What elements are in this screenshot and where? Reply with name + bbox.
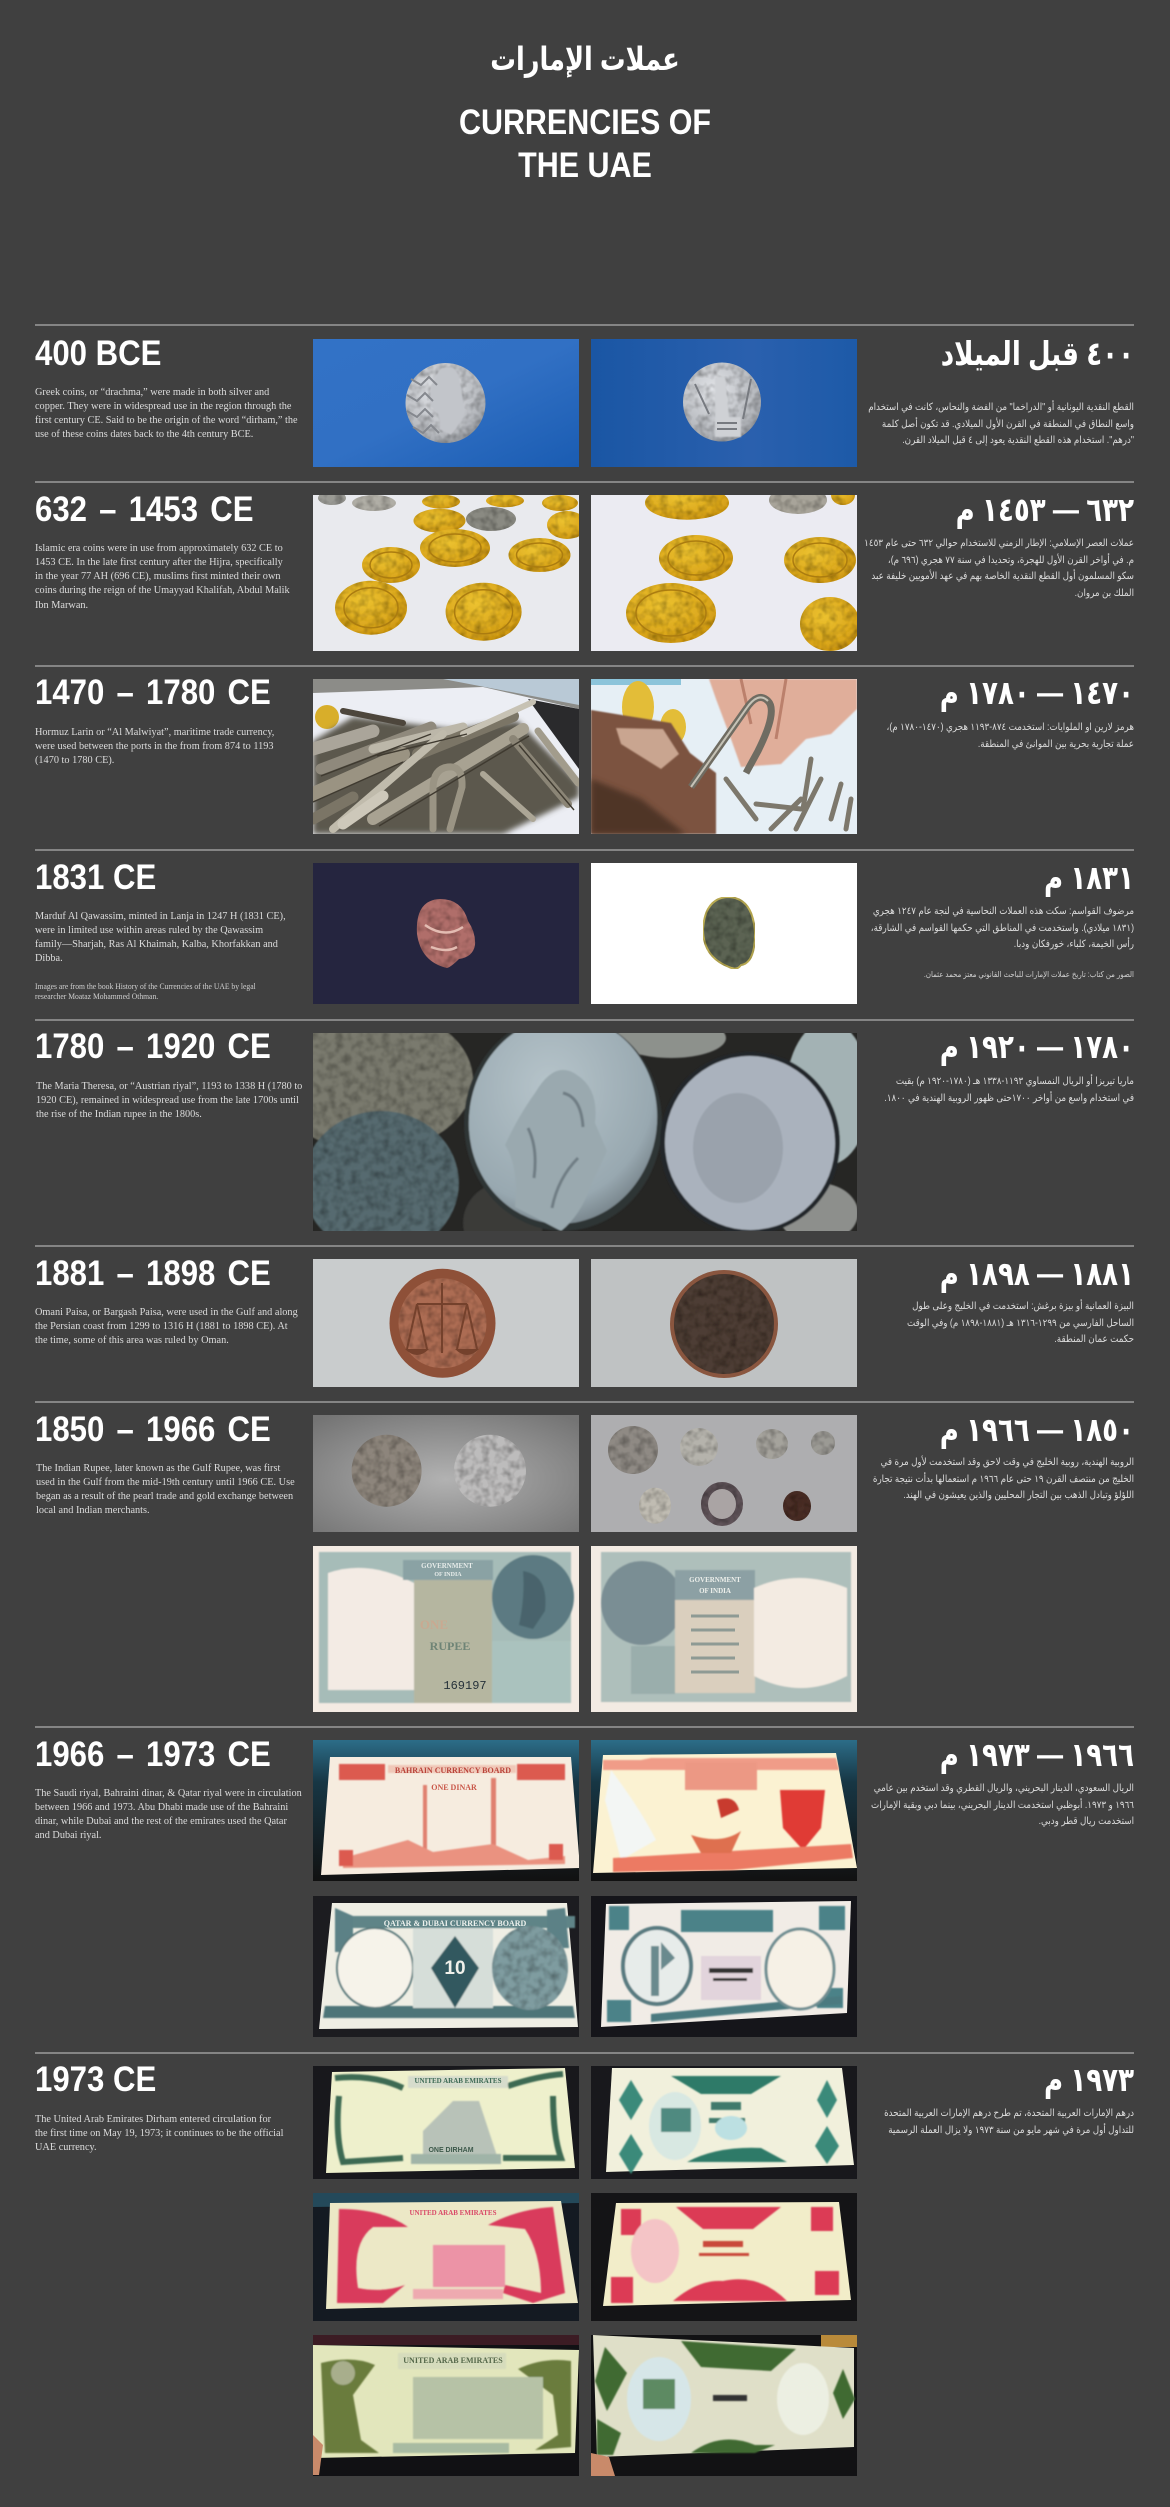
English text: The United Arab Emirates Dirham entered circulation for — [35, 2113, 271, 2125]
Arabic date heading: ١٩٦٦ — ١٩٧٣ م — [940, 1736, 1134, 1773]
English text: the time, some of this area was ruled by Oman. — [35, 1334, 229, 1346]
Arabic text: عملة تجارية بحرية بين الموانئ في المنطقة. — [978, 739, 1134, 750]
English text: began as a result of the pearl trade and gold exchange between — [36, 1490, 293, 1502]
Arabic date heading: ١٩٧٣ م — [1044, 2061, 1134, 2098]
English text: The Indian Rupee, later known as the Gulf Rupee, was first — [36, 1462, 280, 1474]
English text: 1920 CE), remained in widespread use from the late 1700s until — [36, 1094, 299, 1106]
photo: gold coins close-up — [591, 495, 857, 651]
photo: one rupee note front: ONE — [420, 1617, 448, 1632]
date heading: 1831 CE — [35, 858, 156, 897]
Arabic text — [864, 538, 1134, 599]
photo: Bahrain one dinar front — [591, 1740, 857, 1881]
photo: one rupee note front: 169197 — [443, 1679, 487, 1693]
Arabic date heading: ١٧٨٠ — ١٩٢٠ م — [940, 1028, 1134, 1065]
photo: coin on white — [591, 863, 857, 1004]
Arabic text: هرمز لارين او الملوايات: استخدمت ٨٧٤-١١٩٣ هجري (١٤٧٠-١٧٨٠ م)، — [887, 722, 1134, 733]
English text: used in the Gulf from the mid-19th century until 1966 CE. Use — [36, 1476, 295, 1488]
photo: copper coin with scales — [313, 1259, 579, 1387]
Arabic text: ١٩٦٦ و ١٩٧٣. أبوظبي استخدمت الدينار البحريني، بينما دبي وبقية الإمارات — [871, 1800, 1134, 1811]
English text: local and Indian merchants. — [36, 1504, 150, 1516]
photo: one dirham back: ONE DIRHAM — [428, 2147, 474, 2154]
date heading: 1973 CE — [35, 2060, 156, 2099]
English text: coins during the reign of the Umayyad Khalifah, Abdul Malik — [35, 584, 290, 596]
photo: one dirham back: UNITED ARAB EMIRATES — [414, 2077, 502, 2085]
date heading: 1780 – 1920 CE — [35, 1027, 271, 1066]
date heading: 400 BCE — [35, 334, 161, 373]
photo: Qatar and Dubai ten riyals back — [313, 1896, 579, 2037]
Arabic date heading: ١٤٧٠ — ١٧٨٠ م — [940, 674, 1134, 711]
photo: Bahrain one dinar back — [313, 1740, 579, 1881]
photo: hand holding bent silver bar — [591, 679, 857, 834]
English text: between 1966 and 1973. Abu Dhabi made use of the Bahraini — [35, 1801, 288, 1813]
photo: Qatar and Dubai ten riyals back: 10 — [444, 1958, 466, 1979]
Arabic text — [873, 1456, 1134, 1501]
photo: hundred dirhams back — [313, 2335, 579, 2476]
panel: 1470 – 1780 CE — [35, 665, 1134, 834]
image credit — [35, 982, 256, 1001]
English text — [35, 726, 274, 766]
photo: one rupee note back: OF INDIA — [699, 1587, 731, 1595]
Arabic text: للتداول أول مرة في شهر مايو من سنة ١٩٧٣ ولا يزال العملة الرسمية — [888, 2125, 1134, 2136]
English text: in the year 77 AH (696 CE), muslims first minted their own — [35, 570, 281, 582]
photo: one rupee note back: GOVERNMENT — [689, 1576, 741, 1584]
Arabic text: اللؤلؤ وتبادل الذهب بين التجار المحليين والذين يعيشون في الهند. — [903, 1490, 1134, 1501]
English text: The Saudi riyal, Bahraini dinar, & Qatar riyal were in circulation — [35, 1787, 302, 1799]
English text — [35, 542, 290, 611]
English text: Ibn Marwan. — [35, 599, 88, 611]
Arabic text — [868, 400, 1134, 446]
English title — [459, 102, 711, 184]
Arabic text: ماريا تيريزا أو الريال النمساوي ١١٩٣-١٣٣٨ هـ (١٧٨٠-١٩٢٠ م) بقيت — [896, 1076, 1134, 1087]
Arabic text: م. في أواخر القرن الأول للهجرة، وتحديدا في سنة ٧٧ هجري (٦٩٦ م)، — [888, 555, 1134, 566]
English text — [35, 2112, 292, 2154]
Arabic text: في استخدام واسع من أواخر ١٧٠٠حتى ظهور الروبية الهندية في ١٨٠٠. — [884, 1093, 1134, 1104]
English text: first century CE. Said to be the origin of the word “dirham,” the — [35, 414, 298, 426]
English text: 1453 CE. In the late first century after the Hijra, specifically — [35, 556, 283, 568]
English text: Dibba. — [35, 952, 63, 964]
Arabic date heading: ١٨٣١ م — [1044, 859, 1134, 896]
English text: The Maria Theresa, or “Austrian riyal”, 1193 to 1338 H (1780 to — [36, 1080, 302, 1092]
date heading: 632 – 1453 CE — [35, 490, 254, 529]
photo: silver bar money pile — [313, 679, 579, 834]
Arabic title: عملات الإمارات — [490, 41, 680, 77]
Arabic text — [871, 906, 1134, 950]
photo: one rupee note front — [313, 1546, 579, 1712]
photo: Bahrain one dinar back: ONE DINAR — [431, 1783, 477, 1792]
Arabic text: الخليج من منتصف القرن ١٩ حتى عام ١٩٦٦ م استعمالها بدأت نتيجة تجارة — [873, 1474, 1134, 1485]
English text: and Dubai riyal. — [35, 1829, 102, 1841]
date heading: 1850 – 1966 CE — [35, 1410, 271, 1449]
photo: dark copper coin reverse — [591, 1259, 857, 1387]
Arabic text: عملات العصر الإسلامي: الإطار الزمني للاستخدام حوالي ٦٣٢ حتى عام ١٤٥٣ — [864, 538, 1134, 549]
panel: 632 – 1453 CE — [35, 481, 1134, 651]
English text: the Persian coast from 1299 to 1316 H (1881 to 1898 CE). At — [35, 1320, 288, 1332]
panel: 1831 CE — [35, 849, 1134, 1004]
English text: the first time on May 19, 1973; it continues to be the official — [35, 2127, 283, 2139]
photo: copper coin on navy — [313, 863, 579, 1004]
photo: one rupee note front: RUPEE — [430, 1639, 470, 1653]
photo: Maria Theresa silver coins close-up — [313, 1033, 857, 1231]
Arabic text: رأس الخيمة، كلباء، خورفكان ودبا. — [1014, 939, 1134, 950]
panel: 1850 – 1966 CE — [35, 1401, 1134, 1712]
English text: (1470 to 1780 CE). — [35, 754, 114, 766]
photo: coin reverse — [591, 339, 857, 467]
English text: were used between the ports in the from from 874 to 1193 — [35, 740, 274, 752]
Arabic text: الروبية الهندية، روبية الخليج في وقت لاحق وقد استخدمت لأول مرة في — [881, 1457, 1134, 1468]
photo: one dirham front — [591, 2066, 857, 2179]
English text: Greek coins, or “drachma,” were made in both silver and — [35, 386, 269, 398]
photo: seven small coins — [591, 1415, 857, 1532]
photo: gold coins scattered — [313, 495, 579, 651]
Arabic text — [887, 722, 1134, 750]
panel: 1780 – 1920 CE — [35, 1019, 1134, 1231]
English text: Marduf Al Qawassim, minted in Lanja in 1247 H (1831 CE), — [35, 910, 286, 922]
English text — [35, 910, 286, 964]
panel: 1881 – 1898 CE — [35, 1245, 1134, 1387]
image credit: researcher Moataz Mohammed Othman. — [35, 992, 158, 1001]
English title: THE UAE — [518, 146, 652, 184]
photo: fifty dirhams front — [591, 2193, 857, 2321]
English text: the rise of the Indian rupee in the 1800s. — [36, 1108, 202, 1120]
photo: Bahrain one dinar back: BAHRAIN CURRENCY BOARD — [395, 1766, 511, 1775]
photo: two silver rupee coins — [313, 1415, 579, 1532]
Arabic date heading: ١٨٥٠ — ١٩٦٦ م — [940, 1411, 1134, 1448]
Arabic image credit: الصور من كتاب: تاريخ عملات الإمارات للباحث القانوني معتز محمد عثمان. — [924, 970, 1134, 979]
Arabic text: سكو المسلمون أول القطع النقدية الخاصة بهم في عهد الأمويين خليفة عبد — [871, 571, 1134, 582]
English text — [36, 1462, 295, 1516]
Arabic text — [898, 1781, 1134, 1831]
Arabic text: استخدمت ريال قطر ودبي. — [1039, 1816, 1134, 1827]
panel: 1973 CE — [0, 2052, 1170, 2507]
photo: one rupee note back — [591, 1546, 857, 1712]
photo: coin obverse — [313, 339, 579, 467]
photo: hundred dirhams front — [591, 2335, 857, 2476]
image credit: Images are from the book History of the Currencies of the UAE by legal — [35, 982, 256, 991]
photo: one dirham back — [313, 2066, 579, 2179]
English text: UAE currency. — [35, 2141, 97, 2153]
photo: fifty dirhams back: UNITED ARAB EMIRATES — [410, 2209, 497, 2217]
English text — [36, 1080, 302, 1120]
Arabic text: الساحل الفارسي من ١٢٩٩-١٣١٦ هـ (١٨٨١-١٨٩٨ م) وفي الوقت — [907, 1318, 1134, 1329]
Arabic text: واسع النطاق في المنطقة في القرن الأول الميلادي. قد تكون أصل كلمة — [882, 419, 1134, 430]
Arabic date heading: ٦٣٢ — ١٤٥٣ م — [956, 491, 1134, 528]
photo: fifty dirhams back — [313, 2193, 579, 2321]
English text: copper. They were in widespread use in the region through the — [35, 400, 291, 412]
English text: dinar, while Dubai and the rest of the emirates used the Qatar — [35, 1815, 287, 1827]
English text — [35, 1786, 292, 1843]
Arabic text: (١٨٣١ ميلادي). واستخدمت في المناطق التي حكمها القواسم في الشارقة، — [871, 923, 1134, 934]
English title: CURRENCIES OF — [459, 102, 711, 142]
photo: hundred dirhams back: UNITED ARAB EMIRATES — [403, 2356, 503, 2365]
Arabic date heading: ٤٠٠ قبل الميلاد — [941, 335, 1134, 372]
photo: one rupee note front: GOVERNMENT — [421, 1562, 473, 1570]
Arabic text: حكمت عمان المنطقة. — [1054, 1334, 1134, 1345]
English text: were in limited use within areas ruled by the Qawassim — [35, 924, 263, 936]
Arabic text: البيزة العمانية أو بيزة برغش: استخدمت في الخليج وعلى طول — [912, 1301, 1134, 1312]
photo: one rupee note front: OF INDIA — [434, 1572, 462, 1578]
date heading: 1470 – 1780 CE — [35, 673, 271, 712]
title — [459, 41, 711, 184]
Arabic text: درهم الإمارات العربية المتحدة، تم طرح درهم الإمارات العربية المتحدة — [884, 2108, 1134, 2119]
Arabic text: الملك بن مروان. — [1075, 588, 1134, 599]
photo: Qatar and Dubai ten riyals front — [591, 1896, 857, 2037]
date heading: 1881 – 1898 CE — [35, 1254, 271, 1293]
English text: family—Sharjah, Ras Al Khaimah, Kalba, Khorfakkan and — [35, 938, 278, 950]
English text: Islamic era coins were in use from approximately 632 CE to — [35, 542, 283, 554]
Arabic text — [898, 2106, 1134, 2139]
Arabic text: "درهم". استخدام هذه القطع النقدية يعود إلى ٤ قبل الميلاد القرن. — [902, 435, 1134, 446]
English text: Omani Paisa, or Bargash Paisa, were used in the Gulf and along — [35, 1306, 298, 1318]
panel: 400 BCE — [35, 324, 1134, 467]
Arabic text — [907, 1299, 1134, 1345]
English text — [35, 1306, 298, 1346]
Arabic text: الريال السعودي، الدينار البحريني، والريال القطري وقد استخدم بين عامي — [874, 1783, 1134, 1794]
date heading: 1966 – 1973 CE — [35, 1735, 271, 1774]
Arabic date heading: ١٨٨١ — ١٨٩٨ م — [940, 1255, 1134, 1292]
Arabic text: مرضوف القواسم: سكت هذه العملات النحاسية في لنجة عام ١٢٤٧ هجري — [873, 906, 1134, 917]
Arabic text: القطع النقدية اليونانية أو "الدراخما" من الفضة والنحاس، كانت في استخدام — [868, 402, 1134, 413]
English text — [35, 386, 298, 440]
panel: 1966 – 1973 CE — [35, 1726, 1134, 2037]
English text: Hormuz Larin or “Al Malwiyat”, maritime trade currency, — [35, 726, 274, 738]
Arabic text — [884, 1074, 1134, 1104]
photo: Qatar and Dubai ten riyals back: QATAR & DUBAI CURRENCY BOARD — [384, 1919, 526, 1928]
English text: use of these coins dates back to the 4th century BCE. — [35, 428, 253, 440]
